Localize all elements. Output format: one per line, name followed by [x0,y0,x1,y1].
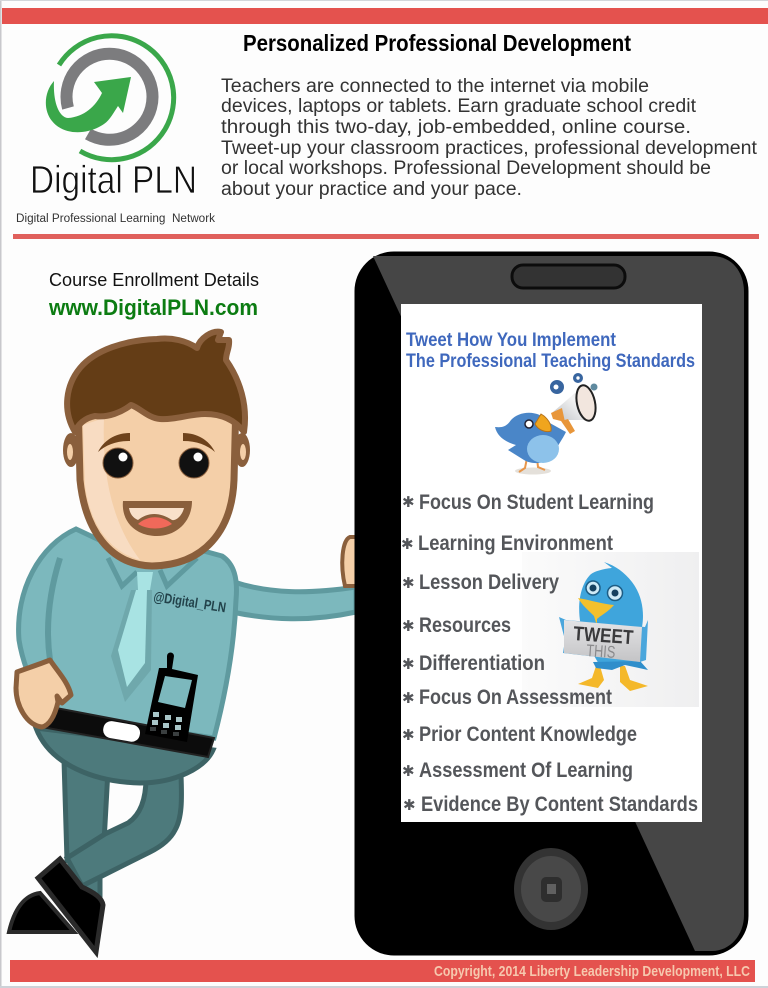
phone speaker [512,265,625,288]
screen heading [406,329,695,372]
eyes [103,448,209,478]
mouth [123,501,192,536]
face [78,400,236,566]
intro paragraph: through this two-day, job-embedded, online course. [221,117,691,138]
list bullets: ✱ [402,689,415,707]
phone body [356,253,747,954]
list bullets: ✱ [402,726,415,744]
list items: Evidence By Content Standards [421,793,698,816]
heading: Personalized Professional Development [243,30,631,56]
list bullets [401,493,416,814]
list items: Differentiation [419,652,545,675]
hair [67,332,245,432]
standards list [401,491,698,816]
intro paragraph: Tweet-up your classroom practices, professional development [221,138,758,159]
tweet sign [559,617,648,662]
logo tagline: Digital Professional Learning Network [16,213,215,225]
sign text: tweet: TWEET [573,623,634,649]
right arm [232,582,356,619]
icon: bird with megaphone [495,373,599,474]
list items [418,491,698,816]
divider red bar [13,234,759,239]
footer bar [10,960,755,982]
list items: Focus On Student Learning [419,491,654,514]
shirt handle text: @Digital_PLN [153,588,227,615]
tie [111,572,153,702]
screen heading: The Professional Teaching Standards [406,350,695,372]
cell phone on belt [145,652,198,742]
list bullets: ✱ [402,762,415,780]
course enrollment details: Course Enrollment Details [49,270,259,290]
intro paragraph: Teachers are connected to the internet via mobile [221,76,649,97]
logo: Digital PLN [16,36,215,225]
bird eyes [586,581,622,600]
bird wings [593,661,648,670]
tweet this bird image [522,552,699,707]
bird body [579,562,643,666]
list bullets: ✱ [402,574,415,592]
hand thumb on phone [342,537,358,586]
list bullets: ✱ [403,796,416,814]
left hand [16,660,71,727]
collar [108,558,197,586]
cartoon teacher character [9,332,358,952]
list items: Learning Environment [418,532,613,555]
list items: Prior Content Knowledge [419,723,637,746]
list items: Resources [419,614,511,637]
screen heading: Tweet How You Implement [406,329,616,351]
intro paragraph: or local workshops. Professional Development should be [221,158,711,179]
list bullets: ✱ [402,655,415,673]
sign text: this: THIS [586,641,616,662]
smartphone [356,253,747,954]
sleeve fold [48,558,60,660]
face highlight [83,418,140,560]
phone screen [401,304,702,822]
top red bar [2,8,768,24]
bird beak [578,598,614,626]
list bullets: ✱ [401,535,414,553]
list items: Assessment Of Learning [419,759,633,782]
front shoe [38,859,103,952]
bird feet [578,666,648,691]
hips [36,728,213,783]
back leg and front leg [64,760,181,900]
home button [514,848,588,930]
phone glare [373,256,744,951]
eyebrows [98,433,215,452]
ears [63,433,250,467]
website link: www.DigitalPLN.com [48,295,258,320]
list items: Focus On Assessment [419,686,612,709]
shirt torso [19,529,236,738]
belt buckle [102,720,141,743]
logo icon: rings and arrow [46,36,174,160]
back shoe [9,893,74,932]
intro paragraph: about your practice and your pace. [221,179,522,200]
intro paragraph: devices, laptops or tablets. Earn graduate school credit [221,96,697,117]
list bullets: ✱ [402,493,415,511]
list bullets: ✱ [402,617,415,635]
belt [42,708,214,757]
list items: Lesson Delivery [419,571,559,594]
intro paragraph [221,76,758,200]
logo wordmark: Digital PLN [30,159,197,202]
image background [522,552,699,707]
